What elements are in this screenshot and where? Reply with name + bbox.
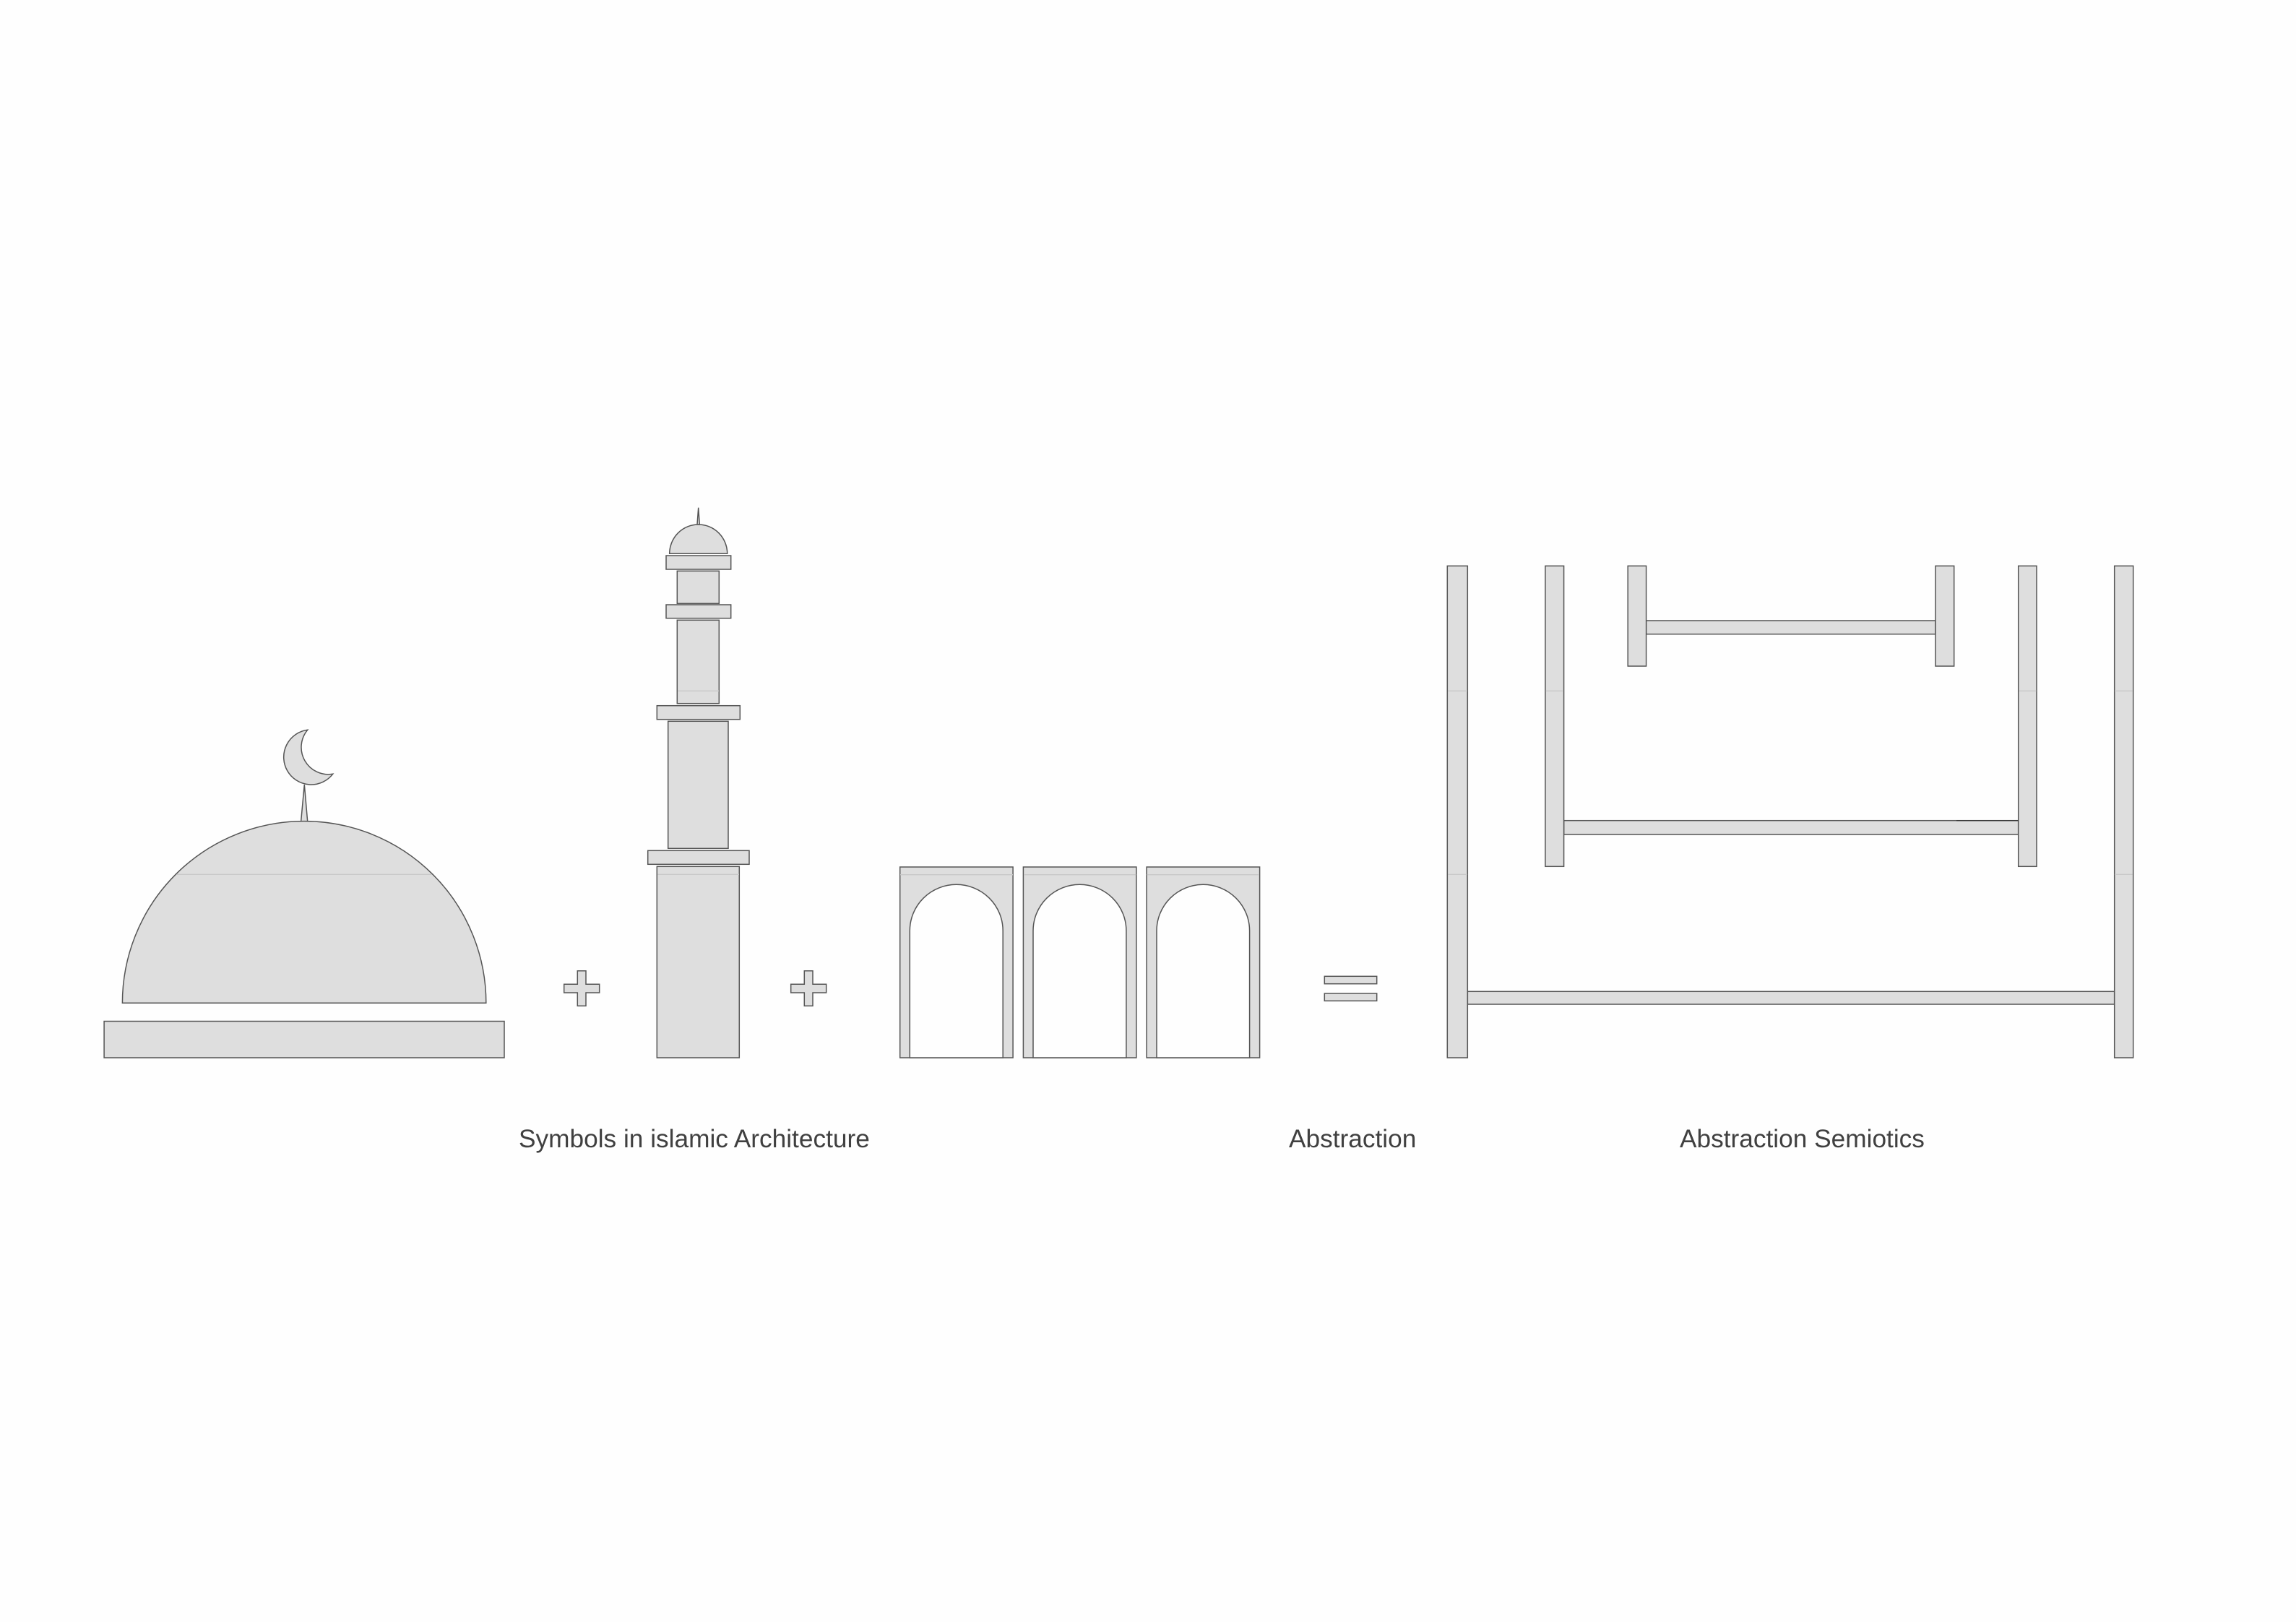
equals sign [1324, 976, 1377, 1001]
arch 1 [900, 867, 1013, 1058]
arch 2 [1023, 867, 1136, 1058]
minaret shaft 2 [677, 620, 719, 704]
minaret ring 2 [666, 605, 731, 618]
outer frame [1447, 566, 2133, 1058]
minaret shaft 3 [668, 721, 728, 848]
plus sign 2 [791, 971, 827, 1006]
icon: three arches [900, 867, 1260, 1058]
inner frame [1628, 566, 1954, 666]
dome [122, 821, 486, 1003]
middle frame [1545, 566, 2037, 866]
minaret shaft 1 [677, 571, 719, 603]
caption: abstraction: Abstraction [1289, 1125, 1416, 1153]
arch 3 [1147, 867, 1260, 1058]
minaret ring 4 [648, 850, 749, 864]
caption: symbols: Symbols in islamic Architecture [519, 1125, 870, 1153]
minaret ring 1 [666, 556, 731, 569]
icon: minaret [648, 508, 749, 1058]
dome base [104, 1022, 504, 1058]
minaret ring 3 [657, 706, 740, 720]
minaret cap [670, 525, 728, 553]
dome finial spire [301, 785, 308, 821]
caption: abstraction semiotics: Abstraction Semiotics [1680, 1125, 1925, 1153]
plus sign 1 [564, 971, 600, 1006]
icon: dome with crescent [104, 730, 504, 1058]
minaret shaft 4 [657, 866, 739, 1058]
diagram: abstraction semiotics [1447, 566, 2133, 1058]
crescent moon [284, 730, 333, 785]
minaret spire [697, 508, 699, 525]
